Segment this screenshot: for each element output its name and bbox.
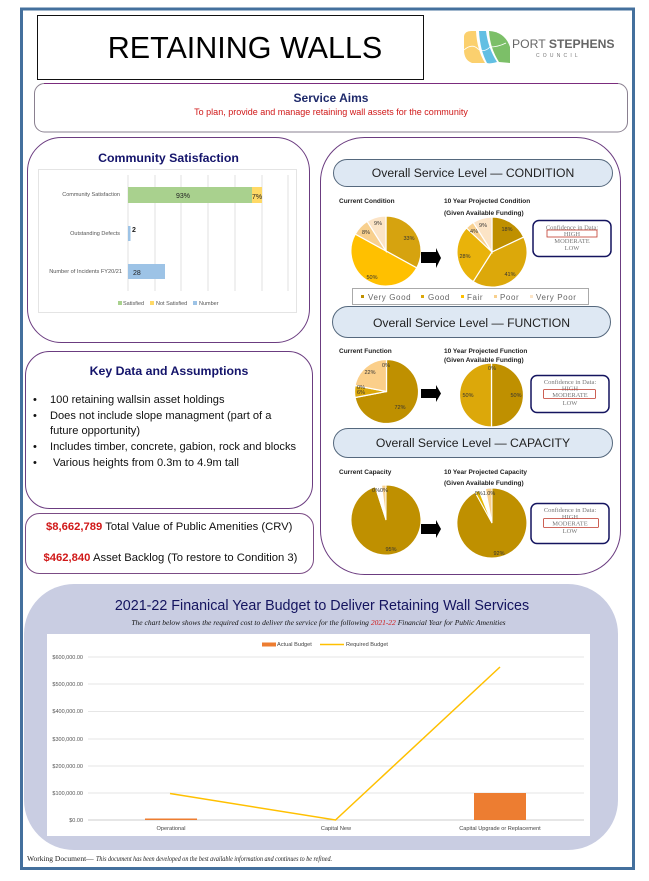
subtitle: budget: The chart below shows the required cost to deliver the service for the following 2021-22 Financial Year for Public Amenities — [131, 618, 506, 627]
pie: current condition — [351, 216, 421, 286]
confidence box: function: MODERATE — [552, 392, 588, 399]
combo chart: budget: $500,000.00 — [52, 682, 83, 688]
heading: key data: Key Data and Assumptions — [90, 364, 249, 378]
confidence box: condition: LOW — [565, 245, 580, 252]
combo chart: budget: $100,000.00 — [52, 791, 83, 797]
bar chart: community satisfaction: Community Satisfaction — [62, 192, 120, 198]
bar chart: community satisfaction: 2 — [132, 227, 136, 234]
logo: Port Stephens Council: COUNCIL — [536, 53, 581, 59]
bar chart: community satisfaction: 28 — [133, 270, 141, 277]
pie: projected condition: 41% — [504, 272, 516, 278]
pie: current condition: 33% — [403, 236, 415, 242]
panel: key data and assumptions — [26, 352, 312, 508]
pill: capacity — [334, 428, 612, 458]
pie: current capacity: 0%0% — [372, 488, 388, 494]
labels: function: 10 Year Projected Function — [444, 348, 527, 355]
bullet list: Includes timber, concrete, gabion, rock and blocks — [50, 441, 296, 453]
bar chart: community satisfaction: 93% — [176, 193, 190, 200]
bullet list: Various heights from 0.3m to 4.9m tall — [53, 457, 239, 469]
pie: projected function: 50% — [510, 393, 522, 399]
combo chart: budget: $200,000.00 — [52, 764, 83, 770]
pie: projected function: 0% — [488, 366, 496, 372]
confidence box: capacity: MODERATE — [552, 520, 588, 528]
footer note: This document has been developed on the best available information and continues to be refined. — [96, 855, 332, 863]
bar chart: community satisfaction: Not Satisfied — [156, 301, 187, 307]
panel: service aims: Service Aims — [294, 91, 369, 105]
panel: budget — [24, 584, 618, 850]
combo chart: budget: Capital Upgrade or Replacement — [459, 826, 541, 832]
pie: projected condition: 18% — [501, 227, 513, 233]
title — [38, 16, 424, 80]
panel: overall service levels — [320, 138, 620, 574]
pie: current condition: 8% — [362, 230, 370, 236]
bar chart: community satisfaction: Number — [199, 301, 219, 307]
pie: projected function — [460, 363, 524, 427]
panel: service aims: To plan, provide and manage retaining wall assets for the community — [194, 107, 468, 117]
pie: projected capacity: 0%1.0% — [475, 491, 495, 497]
bar chart: community satisfaction — [38, 170, 296, 312]
legend: condition: Poor — [500, 293, 519, 302]
pie: projected condition: 4% — [470, 229, 478, 235]
bullet list: • — [33, 410, 37, 422]
confidence box: condition: Confidence in Data: — [546, 224, 598, 232]
panel: community satisfaction — [28, 138, 310, 342]
pill: function — [332, 306, 610, 338]
bar chart: community satisfaction: Outstanding Defects — [70, 231, 120, 237]
labels: condition: 10 Year Projected Condition — [444, 198, 530, 205]
pie: projected function: 50% — [462, 393, 474, 399]
labels: function: Current Function — [339, 348, 392, 355]
confidence box: capacity: HIGH — [562, 514, 578, 521]
pie: projected condition — [457, 217, 527, 287]
confidence box: capacity — [531, 504, 609, 544]
pill: capacity: Overall Service Level — CAPACITY — [376, 436, 570, 450]
confidence box: condition: MODERATE — [554, 238, 590, 245]
labels: condition: Current Condition — [339, 198, 395, 205]
labels: function — [339, 348, 527, 364]
pie: projected condition: 9% — [479, 223, 487, 229]
combo chart: budget: Required Budget — [346, 642, 388, 648]
combo chart: budget — [47, 634, 590, 836]
arrow: capacity — [421, 520, 441, 538]
pie: current function: 0% — [382, 363, 390, 369]
combo chart: budget: Capital New — [321, 826, 352, 832]
pie: current function: 0% — [357, 385, 365, 391]
pie: current function — [355, 359, 419, 424]
pie: current condition: 50% — [366, 275, 378, 281]
logo: Port Stephens Council: PORT STEPHENS — [512, 37, 615, 51]
legend: condition: Good — [428, 293, 450, 302]
confidence box: capacity: LOW — [563, 528, 578, 535]
pie: current function: 72% — [394, 405, 406, 411]
confidence box: function: Confidence in Data: — [544, 379, 596, 386]
pie: projected capacity: 92% — [493, 551, 505, 557]
logo: Port Stephens Council — [464, 31, 615, 63]
bullet list: future opportunity) — [50, 425, 140, 437]
heading: budget: 2021-22 Finanical Year Budget to Deliver Retaining Wall Services — [115, 598, 529, 614]
pie: current condition: 9% — [374, 221, 382, 227]
confidence box: condition — [533, 220, 611, 256]
bar chart: community satisfaction: 7% — [252, 194, 262, 201]
panel: values — [26, 514, 314, 574]
pill: condition: Overall Service Level — CONDITION — [372, 166, 574, 180]
pie: projected capacity — [457, 488, 527, 558]
bullet list: 100 retaining wallsin asset holdings — [50, 394, 225, 406]
labels: capacity — [339, 469, 527, 487]
combo chart: budget: $400,000.00 — [52, 709, 83, 715]
footer note: Working Document— — [27, 854, 94, 863]
bullet list: • — [33, 457, 37, 469]
bullet list: Does not include slope managment (part of a — [50, 410, 272, 422]
labels: function: (Given Available Funding) — [444, 357, 524, 364]
title: RETAINING WALLS — [108, 31, 382, 65]
confidence box: capacity: Confidence in Data: — [544, 507, 596, 514]
combo chart: budget: $0.00 — [69, 818, 83, 824]
labels: capacity: Current Capacity — [339, 469, 392, 476]
panel: values: $8,662,789 Total Value of Public Amenities (CRV) — [46, 521, 293, 533]
labels: capacity: (Given Available Funding) — [444, 480, 524, 487]
bullet list: • — [33, 394, 37, 406]
bar chart: community satisfaction: Number of Incidents FY20/21 — [49, 269, 122, 275]
panel: values: $462,840 Asset Backlog (To restore to Condition 3) — [44, 552, 298, 564]
footer note — [27, 854, 332, 863]
arrow: condition — [421, 248, 441, 268]
pie: projected condition: 28% — [459, 254, 471, 260]
pill: function: Overall Service Level — FUNCTION — [373, 316, 570, 330]
pie: current function: 6% — [357, 390, 365, 396]
bar chart: community satisfaction: Satisfied — [123, 301, 144, 307]
legend: condition: Very Good — [368, 293, 411, 302]
bullet list: • — [33, 441, 37, 453]
legend: condition: Fair — [467, 293, 483, 302]
confidence box: function — [531, 376, 609, 412]
arrow: function — [421, 385, 441, 402]
pie: current capacity — [351, 485, 421, 555]
pill: condition — [334, 160, 612, 186]
confidence box: function: HIGH — [562, 386, 578, 392]
combo chart: budget: Actual Budget — [277, 642, 312, 648]
confidence box: condition: HIGH — [564, 231, 580, 238]
combo chart: budget: $300,000.00 — [52, 737, 83, 743]
labels: capacity: 10 Year Projected Capacity — [444, 469, 527, 476]
legend: condition: Very Poor — [536, 293, 577, 302]
bullet list — [33, 394, 296, 469]
combo chart: budget: Operational — [157, 826, 185, 832]
heading: community satisfaction: Community Satisfaction — [98, 151, 239, 165]
confidence box: function: LOW — [563, 400, 578, 407]
labels: condition: (Given Available Funding) — [444, 210, 524, 217]
panel: service aims — [34, 84, 628, 132]
labels: condition — [339, 198, 530, 217]
legend: condition — [352, 288, 588, 304]
pie: current capacity: 95% — [385, 547, 397, 553]
combo chart: budget: $600,000.00 — [52, 655, 83, 661]
pie: current function: 22% — [364, 370, 376, 376]
